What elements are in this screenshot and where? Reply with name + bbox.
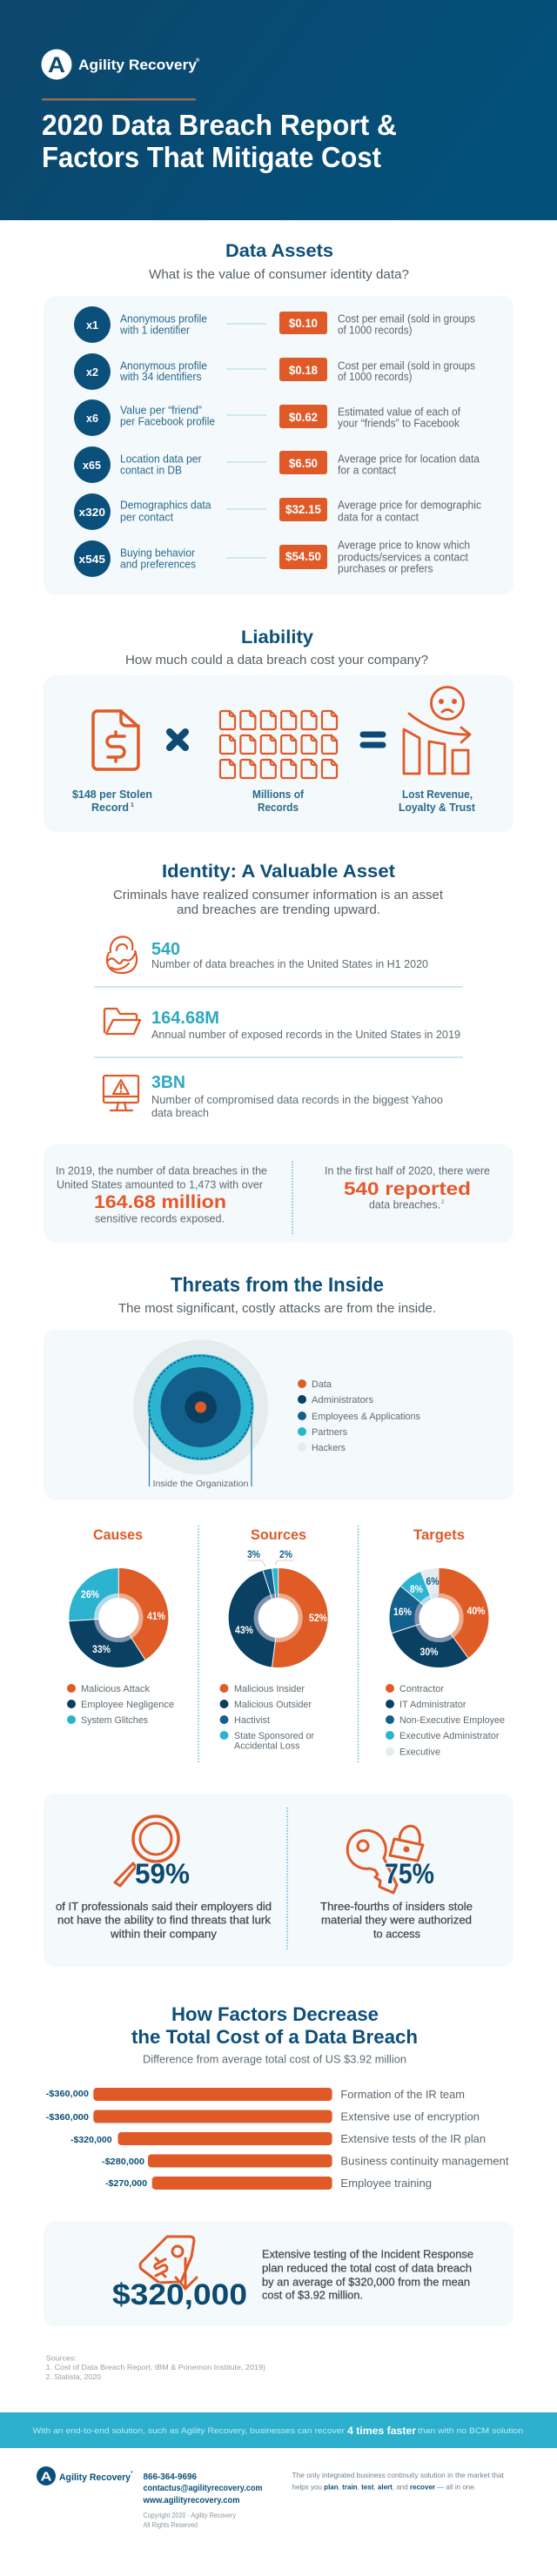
legend: causes: Malicious Attack xyxy=(81,1684,150,1694)
text: saving description: cost of $3.92 million. xyxy=(262,2289,363,2301)
row: x65: $6.50 xyxy=(289,456,318,470)
text: 2019 breaches: sensitive records exposed. xyxy=(95,1212,225,1224)
row: x2: Cost per email (sold in groups xyxy=(338,359,475,372)
stat: 540 breaches: 540 xyxy=(151,940,180,959)
legend: causes: Employee Negligence xyxy=(81,1700,174,1710)
text: 59 percent description: of IT professionals said their employers did xyxy=(56,1901,272,1913)
row: x320: Demographics data xyxy=(120,499,211,511)
donut: sources: 2% xyxy=(279,1550,292,1560)
heading: sources: Sources xyxy=(251,1526,306,1543)
icon: magnifying glass xyxy=(115,1816,178,1886)
text: 2020 breaches xyxy=(325,1164,490,1211)
heading: causes: Causes xyxy=(93,1526,143,1543)
icon: key and padlock xyxy=(347,1826,423,1893)
label: lost revenue xyxy=(399,788,476,814)
row: x2: of 1000 records) xyxy=(338,371,413,383)
label: millions of records: Millions of xyxy=(252,788,305,801)
heading: threats: Threats from the Inside xyxy=(171,1273,384,1296)
sources: 2. Statista, 2020 xyxy=(46,2372,101,2381)
subheading: how factors decrease: Difference from average total cost of US $3.92 million xyxy=(143,2052,406,2066)
bar: employee training: Employee training xyxy=(340,2177,432,2190)
stat: 3BN records: 3BN xyxy=(151,1073,185,1092)
row: x65: Average price for location data xyxy=(338,453,480,465)
text: saving description: by an average of $320,000 from the mean xyxy=(262,2277,470,2289)
stat: 164.68M records: 164.68M xyxy=(151,1009,219,1028)
bar: IR plan tests: Extensive tests of the IR plan xyxy=(340,2133,486,2145)
row: x2: Anonymous profile xyxy=(120,359,207,372)
chart: causes xyxy=(67,1526,174,1726)
bar: business continuity: -$280,000 xyxy=(102,2157,144,2167)
legend: sources: Hactivist xyxy=(234,1715,270,1726)
subheading: data assets: What is the value of consumer identity data? xyxy=(149,268,409,282)
legend: threat layers: Partners xyxy=(312,1427,347,1438)
panel: threat layers xyxy=(44,1330,513,1500)
donut: targets: 8% xyxy=(410,1585,423,1595)
row: x6: Value per “friend” xyxy=(120,405,202,417)
legend: targets: Contractor xyxy=(399,1684,444,1694)
header banner xyxy=(0,0,557,220)
donut: targets: 16% xyxy=(393,1607,412,1618)
footer contact: All Rights Reserved xyxy=(143,2521,198,2529)
icon: falling chart and sad face xyxy=(404,688,470,774)
bar: business continuity: Business continuity management xyxy=(340,2155,509,2167)
bar chart: cost differences xyxy=(46,2088,509,2190)
heading: liability: Liability xyxy=(241,627,313,647)
row: x1: of 1000 records) xyxy=(338,324,413,336)
row: x545: $54.50 xyxy=(285,549,321,563)
panel: data assets xyxy=(44,296,513,595)
footer tagline: helps you plan, train, test, alert, and recover — all in one. xyxy=(292,2482,476,2491)
subheading: identity: and breaches are trending upward. xyxy=(177,903,380,917)
donut: causes: 41% xyxy=(147,1612,165,1622)
bar: business continuity xyxy=(102,2155,509,2167)
text: 75 percent description: material they were authorized xyxy=(321,1915,472,1927)
heading: targets: Targets xyxy=(413,1526,465,1543)
label: lost revenue: Loyalty & Trust xyxy=(399,801,476,814)
row: x545: x545 xyxy=(78,553,105,566)
row: x6: x6 xyxy=(86,412,98,425)
title: 2020 Data Breach Report & xyxy=(42,109,397,141)
logo xyxy=(42,49,200,80)
row: x6: your “friends” to Facebook xyxy=(338,417,460,429)
legend: targets xyxy=(386,1684,505,1758)
text: 75 percent description xyxy=(320,1901,473,1941)
text: 59 percent description: within their company xyxy=(110,1929,218,1941)
label: millions of records xyxy=(252,788,305,814)
bar: encryption xyxy=(46,2110,480,2123)
heading: data assets: Data Assets xyxy=(225,241,333,261)
bar: formation of the IR team: Formation of the IR team xyxy=(340,2089,465,2101)
chart: concentric circles xyxy=(133,1340,268,1489)
icon: price tag xyxy=(140,2237,197,2289)
heading: how factors decrease xyxy=(131,2003,418,2048)
panel: liability xyxy=(44,675,513,832)
donut: targets: 40% xyxy=(466,1607,486,1617)
row: x545: purchases or prefers xyxy=(338,562,433,574)
legend: targets: Executive xyxy=(399,1748,440,1758)
row: x6: per Facebook profile xyxy=(120,415,215,427)
donut: causes xyxy=(69,1568,165,1660)
row: x1: with 1 identifier xyxy=(119,324,190,336)
row: x65: for a contact xyxy=(338,464,397,476)
row: x2: with 34 identifiers xyxy=(119,371,202,383)
icon: folder xyxy=(104,1009,140,1034)
legend: threat layers: Hackers xyxy=(312,1443,346,1453)
banner: recovery statement: 4 times faster xyxy=(347,2426,417,2437)
logo: A xyxy=(48,53,65,77)
stat: 164.68M records xyxy=(104,1009,460,1041)
icon: grid of records xyxy=(220,711,337,778)
label: stolen record xyxy=(72,788,152,814)
icon: equals sign xyxy=(363,735,383,745)
row: x545: products/services a contact xyxy=(338,551,469,563)
icon: document with dollar sign xyxy=(93,711,138,769)
text: 59 percent description: not have the ability to find threats that lurk xyxy=(57,1915,272,1927)
footer contact: contactus@agilityrecovery.com xyxy=(143,2483,263,2493)
row: x6: $0.62 xyxy=(289,410,318,424)
heading: how factors decrease: How Factors Decrease xyxy=(171,2003,379,2025)
bar: formation of the IR team xyxy=(46,2088,465,2101)
row: x6 xyxy=(74,399,461,436)
bar: encryption: Extensive use of encryption xyxy=(340,2111,480,2123)
text: 59 percent description xyxy=(56,1901,272,1941)
legend: targets: IT Administrator xyxy=(399,1700,466,1710)
text: 2019 breaches: 164.68 million xyxy=(94,1192,226,1212)
logo: Agility Recovery xyxy=(78,57,198,73)
bar: employee training: -$270,000 xyxy=(105,2178,147,2189)
text: 75 percent description: to access xyxy=(373,1929,420,1941)
legend: threat layers xyxy=(298,1379,420,1453)
row: x320: per contact xyxy=(120,511,174,523)
logo: ® xyxy=(196,57,200,64)
donut: targets: 30% xyxy=(419,1647,439,1658)
bar: employee training xyxy=(105,2177,432,2190)
legend: threat layers: Data xyxy=(312,1379,332,1390)
bar: IR plan tests: -$320,000 xyxy=(70,2135,112,2145)
legend: sources: State Sponsored or xyxy=(234,1731,314,1741)
chart: concentric circles: Inside the Organization xyxy=(153,1479,249,1489)
footer contact xyxy=(143,2472,263,2529)
sources xyxy=(46,2353,265,2381)
text: 2020 breaches: data breaches. xyxy=(369,1198,440,1211)
footer logo xyxy=(37,2466,133,2485)
stat: 3BN records xyxy=(104,1073,443,1119)
icon: broken padlock xyxy=(107,936,137,973)
row: x320: Average price for demographic xyxy=(338,499,481,511)
text: saving description: Extensive testing of the Incident Response xyxy=(262,2249,473,2261)
text: saving description: plan reduced the total cost of data breach xyxy=(262,2263,472,2275)
text: 2019 breaches: United States amounted to 1,473 with over xyxy=(57,1178,263,1191)
row: x320 xyxy=(74,493,481,530)
stat: 3BN records: Number of compromised data records in the biggest Yahoo xyxy=(151,1094,443,1106)
row: x2 xyxy=(74,353,475,390)
row: x2: $0.18 xyxy=(289,363,318,377)
text: 2019 breaches: In 2019, the number of data breaches in the xyxy=(56,1164,267,1177)
panel: breach summary xyxy=(44,1144,513,1243)
label: stolen record: $148 per Stolen xyxy=(72,788,152,801)
legend: causes xyxy=(67,1684,174,1726)
footer logo: A xyxy=(40,2470,52,2484)
stat: 320,000 dollars: $320,000 xyxy=(112,2278,247,2311)
banner: recovery statement xyxy=(0,2412,557,2448)
sources: Sources: xyxy=(46,2353,77,2362)
label: millions of records: Records xyxy=(258,801,299,814)
stat: 75 percent: 75% xyxy=(385,1858,434,1889)
row: x545: Buying behavior xyxy=(120,547,195,559)
stat: 540 breaches xyxy=(107,936,428,973)
banner: recovery statement: than with no BCM solution xyxy=(418,2426,523,2436)
row: x545: and preferences xyxy=(120,558,196,570)
donut: targets xyxy=(392,1572,486,1658)
footer tagline xyxy=(292,2471,505,2491)
panel: incident response saving xyxy=(44,2221,513,2326)
stat: 164.68M records: Annual number of exposed records in the United States in 2019 xyxy=(151,1029,460,1041)
row: x2: x2 xyxy=(86,366,98,379)
title xyxy=(42,109,397,173)
legend: threat layers: Administrators xyxy=(312,1395,374,1405)
legend: targets: Executive Administrator xyxy=(399,1731,500,1741)
legend: sources xyxy=(219,1684,314,1751)
row: x1 xyxy=(74,306,475,343)
panel: insider stats xyxy=(44,1794,513,1967)
text: 2020 breaches: In the first half of 2020, there were xyxy=(325,1164,490,1177)
row: x1: $0.10 xyxy=(289,316,318,330)
subheading: liability: How much could a data breach cost your company? xyxy=(125,654,428,667)
heading: identity: Identity: A Valuable Asset xyxy=(162,862,395,882)
icon: multiply sign xyxy=(170,732,185,748)
row: x1: x1 xyxy=(86,319,98,332)
banner: recovery statement: With an end-to-end solution, such as Agility Recovery, businesses can recover xyxy=(33,2426,345,2436)
bar: IR plan tests xyxy=(70,2132,486,2145)
footer contact: www.agilityrecovery.com xyxy=(143,2495,240,2506)
row: x6: Estimated value of each of xyxy=(338,406,461,418)
row: x320: data for a contact xyxy=(338,511,419,523)
row: x545: Average price to know which xyxy=(338,539,470,551)
donut: causes: 33% xyxy=(92,1645,111,1655)
donut: sources: 43% xyxy=(235,1626,253,1636)
row: x65 xyxy=(74,446,480,483)
text: 2020 breaches: 540 reported xyxy=(344,1179,471,1199)
footer logo: ® xyxy=(131,2470,133,2474)
footer tagline: The only integrated business continuity solution in the market that xyxy=(292,2471,505,2479)
row: x1: Anonymous profile xyxy=(120,312,207,325)
subheading: threats: The most significant, costly attacks are from the inside. xyxy=(118,1302,436,1316)
legend: sources: Accidental Loss xyxy=(234,1741,300,1751)
label: stolen record: Record xyxy=(91,801,129,814)
text: 2019 breaches xyxy=(56,1164,267,1224)
subheading: identity: Criminals have realized consumer information is an asset xyxy=(113,889,443,902)
chart: sources xyxy=(219,1526,327,1751)
footer logo: Agility Recovery xyxy=(59,2472,131,2483)
label: lost revenue: Lost Revenue, xyxy=(402,788,473,801)
heading: how factors decrease: the Total Cost of a Data Breach xyxy=(131,2026,418,2048)
donut: causes: 26% xyxy=(81,1590,99,1600)
footer contact: 866-364-9696 xyxy=(143,2472,197,2482)
stat: 3BN records: data breach xyxy=(151,1107,209,1119)
bar: encryption: -$360,000 xyxy=(46,2112,89,2123)
legend: threat layers: Employees & Applications xyxy=(312,1412,420,1422)
label: stolen record: 1 xyxy=(131,802,134,808)
stat: 540 breaches: Number of data breaches in the United States in H1 2020 xyxy=(151,958,428,970)
text: 2020 breaches: 2 xyxy=(441,1200,445,1205)
sources: 1. Cost of Data Breach Report, IBM & Ponemon Institute, 2019) xyxy=(46,2363,265,2371)
row: x65: contact in DB xyxy=(120,464,182,476)
footer contact: Copyright 2020 - Agility Recovery xyxy=(143,2512,236,2519)
icon: monitor with warning xyxy=(104,1076,138,1110)
title: Factors That Mitigate Cost xyxy=(42,141,381,173)
donut: sources: 3% xyxy=(247,1550,260,1560)
chart: targets xyxy=(386,1526,505,1758)
row: x320: x320 xyxy=(78,506,105,519)
text: 75 percent description: Three-fourths of insiders stole xyxy=(320,1901,473,1913)
stat: 59 percent: 59% xyxy=(135,1858,190,1889)
legend: sources: Malicious Outsider xyxy=(234,1700,312,1710)
row: x1: Cost per email (sold in groups xyxy=(338,312,475,325)
row: x65: Location data per xyxy=(120,453,202,465)
row: x65: x65 xyxy=(83,459,101,472)
legend: sources: Malicious Insider xyxy=(234,1684,305,1694)
row: x320: $32.15 xyxy=(285,502,321,516)
legend: targets: Non-Executive Employee xyxy=(399,1715,505,1726)
subheading: identity xyxy=(113,889,443,917)
bar: formation of the IR team: -$360,000 xyxy=(46,2089,89,2099)
row: x545 xyxy=(74,539,470,577)
donut: sources xyxy=(235,1550,327,1667)
donut: targets: 6% xyxy=(426,1577,439,1587)
donut: sources: 52% xyxy=(309,1613,327,1624)
legend: causes: System Glitches xyxy=(81,1715,148,1726)
text: saving description xyxy=(262,2249,473,2301)
